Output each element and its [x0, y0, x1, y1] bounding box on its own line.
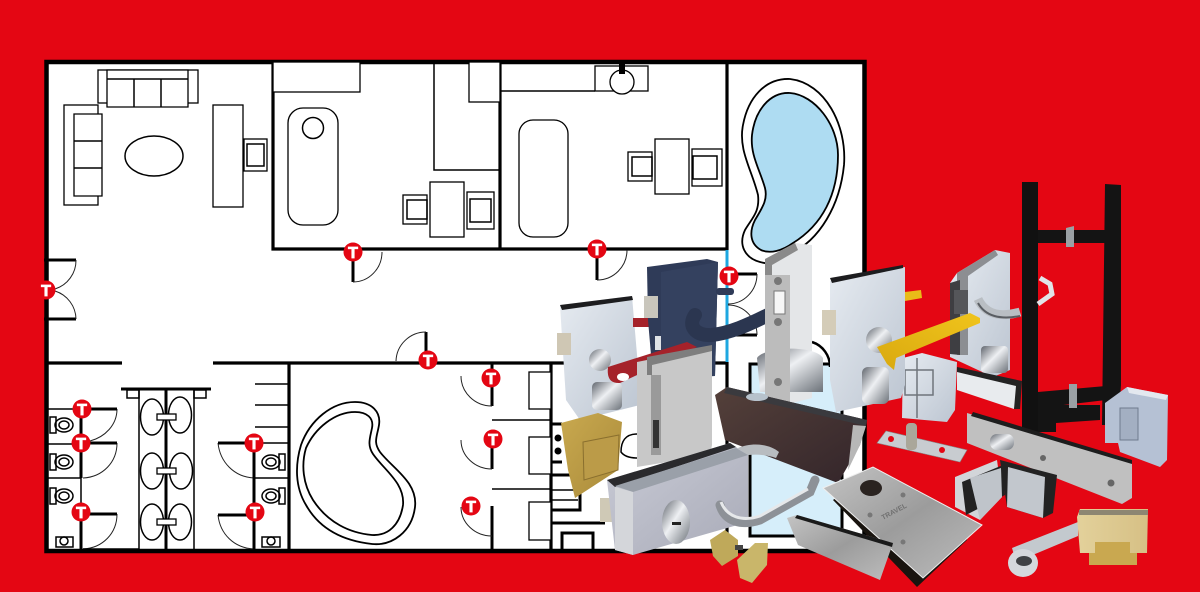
product: tall silver lock — [757, 243, 823, 410]
product: pivot bar — [877, 423, 967, 462]
product: floor spring plate: TRAVEL — [881, 502, 909, 522]
T door markers: T — [724, 269, 734, 286]
T door markers: T — [466, 499, 476, 516]
building outline — [46, 62, 864, 551]
interior walls — [44, 62, 757, 551]
product: silver lock with lever front — [600, 443, 815, 555]
product: brass hinge left — [561, 413, 622, 498]
product: long clamp bar — [967, 412, 1132, 504]
T door markers: T — [76, 505, 86, 522]
lounge furniture — [64, 70, 267, 207]
T door markers: T — [249, 436, 259, 453]
T door markers: T — [488, 432, 498, 449]
room one furniture — [273, 62, 500, 237]
floor plan — [36, 62, 864, 551]
product: red key handle — [608, 342, 697, 383]
central vanity block — [121, 389, 211, 551]
T door markers: T — [76, 436, 86, 453]
T door markers: T — [250, 505, 260, 522]
product: navy lever lock — [644, 259, 768, 378]
kitchen area — [529, 372, 710, 551]
product: brass knob — [710, 530, 768, 583]
toilets — [50, 417, 285, 547]
product: glass channel — [957, 367, 1022, 409]
pool room lower right — [728, 342, 842, 536]
central pool outline — [297, 402, 415, 544]
T door markers: T — [423, 353, 433, 370]
product: chrome hinge — [902, 353, 957, 422]
product: glass corner clamps — [955, 460, 1057, 520]
product: silver lock left — [557, 296, 649, 420]
product: chrome lever lock right — [950, 250, 1052, 377]
washroom partitions — [48, 384, 289, 551]
product: brass hinge with arm — [1008, 509, 1148, 577]
T door markers — [36, 240, 738, 522]
T door markers: T — [348, 245, 358, 262]
pool top right — [742, 79, 844, 263]
door swing arcs — [55, 250, 757, 549]
product: floor spring plate — [823, 467, 982, 587]
T door markers: T — [77, 402, 87, 419]
product: grey strike lock — [637, 345, 712, 467]
T door markers: T — [41, 283, 51, 300]
product: silver wall hinge — [1105, 387, 1168, 467]
product: silver lock with yellow key handle — [822, 265, 980, 412]
product: glass clip — [787, 515, 893, 580]
T door markers: T — [486, 371, 496, 388]
T door markers: T — [592, 242, 602, 259]
product: bronze glass patch — [715, 387, 867, 483]
product: black pull handle — [1022, 182, 1121, 432]
room two furniture — [500, 62, 722, 237]
